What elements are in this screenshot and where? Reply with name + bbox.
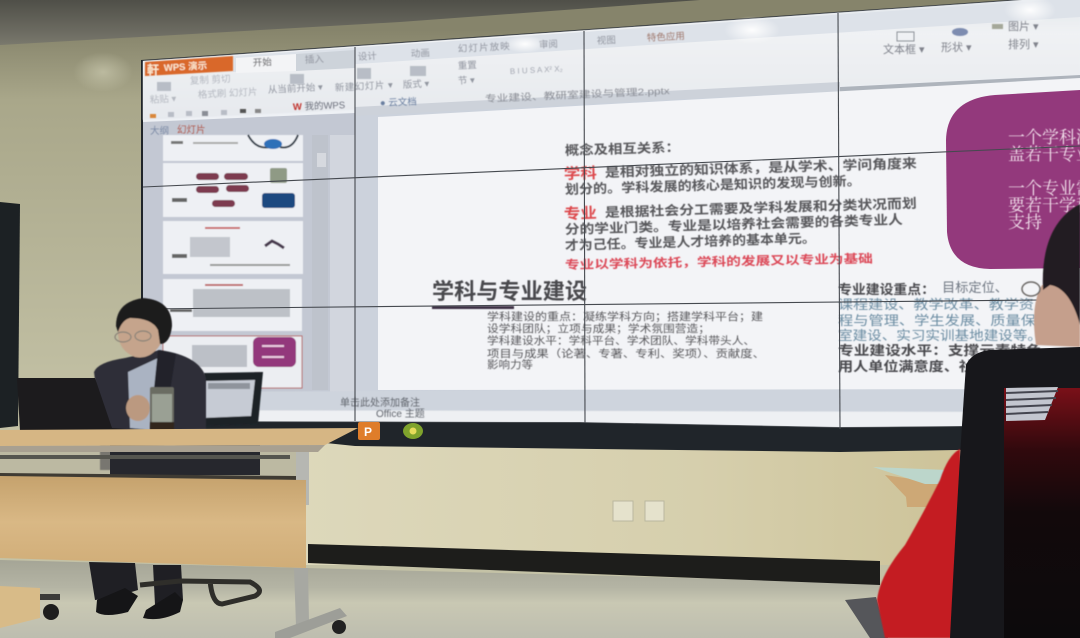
ribbon labels: 插入 bbox=[305, 53, 325, 66]
slide text: discipline building bbox=[487, 310, 765, 371]
ribbon labels: 形状 ▾ bbox=[941, 40, 972, 54]
thumbnail 3 bbox=[163, 221, 303, 274]
slide text: concepts: 概念及相互关系： bbox=[565, 140, 680, 158]
glasses bbox=[1022, 282, 1040, 296]
slide text: concepts: 分的学业门类。专业是以培养社会需要的各类专业人 bbox=[565, 212, 903, 237]
audience head bbox=[1022, 204, 1080, 347]
slide text: concepts: 专业以学科为依托，学科的发展又以专业为基础 bbox=[565, 251, 873, 272]
seat mesh with red jacket behind bbox=[1004, 388, 1080, 638]
ribbon labels: 新建幻灯片 ▾ bbox=[335, 79, 393, 94]
application window bbox=[143, 0, 1080, 427]
callout text: 支持 bbox=[1008, 213, 1042, 232]
notes labels: Office 主题 bbox=[376, 408, 425, 420]
ribbon labels: 设计 bbox=[358, 50, 378, 63]
slide text: discipline building: 学科建设的重点：凝练学科方向；搭建学科平台；建 bbox=[487, 310, 764, 323]
slide thumbnails bbox=[163, 135, 303, 388]
glasses bbox=[115, 331, 151, 342]
slide heading: 学科与专业建设 bbox=[432, 279, 587, 304]
WPS button bbox=[145, 56, 233, 77]
ribbon icons bbox=[150, 24, 1003, 118]
slide text: major building: 目标定位、 bbox=[942, 280, 1008, 295]
ribbon labels: 审阅 bbox=[539, 38, 558, 51]
striped shirt through mesh bbox=[1006, 387, 1058, 421]
foreground chair foot bbox=[845, 597, 888, 638]
front-left wooden block and caster bbox=[0, 586, 60, 628]
ribbon labels: 排列 ▾ bbox=[1008, 37, 1039, 51]
ribbon labels: 重置 bbox=[458, 59, 477, 72]
thumbnail 2 bbox=[163, 163, 303, 217]
thumbnail 5 bbox=[163, 336, 302, 388]
ribbon labels: ● 云文档 bbox=[380, 96, 417, 109]
ribbon labels: 视图 bbox=[597, 34, 616, 47]
ribbon labels: 粘贴 ▾ bbox=[150, 93, 177, 106]
ribbon labels: 幻灯片放映 bbox=[458, 40, 511, 55]
ribbon labels bbox=[150, 20, 1039, 137]
audience member in red bbox=[877, 449, 965, 638]
ribbon labels: B I U S A X² X₂ bbox=[510, 64, 563, 76]
ribbon labels: 大纲 bbox=[150, 125, 169, 137]
lecturer's chair back bbox=[198, 372, 263, 426]
notes labels: 单击此处添加备注 bbox=[340, 396, 420, 409]
slide text: concepts: 才为己任。专业是人才培养的基本单元。 bbox=[565, 231, 816, 253]
face bbox=[1034, 285, 1080, 347]
audience table bbox=[873, 467, 947, 507]
ribbon labels: 复制 剪切 bbox=[190, 73, 231, 87]
purple callout bbox=[946, 90, 1080, 269]
heading underline bbox=[432, 306, 514, 309]
lecturer bbox=[94, 298, 206, 470]
callout text bbox=[1008, 128, 1080, 232]
ribbon labels: W 我的WPS bbox=[293, 99, 345, 113]
slide text: concepts: 划分的。学科发展的核心是知识的发现与创新。 bbox=[565, 173, 861, 197]
slide text: discipline building: 学科建设水平：学科平台、学术团队、学科带头人、 bbox=[487, 334, 755, 347]
desk legs bbox=[296, 445, 309, 505]
slide bbox=[378, 78, 1080, 390]
laptop bbox=[17, 378, 140, 431]
ribbon labels: 格式刷 幻灯片 bbox=[198, 86, 258, 101]
lecture desk bbox=[0, 428, 358, 638]
thumbnail panel bbox=[143, 113, 355, 420]
hair bbox=[116, 298, 172, 344]
screen frame and taskbar band bbox=[141, 0, 1080, 452]
glare bbox=[724, 16, 780, 44]
slide text: concepts: 是相对独立的知识体系，是从学术、学问角度来 bbox=[605, 156, 917, 180]
shirt bbox=[128, 358, 158, 430]
taskbar icons: P bbox=[364, 425, 372, 439]
hair bbox=[1043, 204, 1080, 325]
under-desk shadow space bbox=[0, 445, 306, 478]
lecturer legs and chair base bbox=[89, 562, 259, 619]
ribbon labels: 节 ▾ bbox=[458, 75, 475, 87]
slide text: major building: 专业建设重点： bbox=[838, 282, 935, 297]
jacket bbox=[94, 350, 206, 470]
slide text: major building bbox=[838, 280, 1042, 374]
WPS button: 軒 bbox=[147, 62, 159, 77]
slide text: concepts: 是根据社会分工需要及学科发展和分类状况而划 bbox=[605, 196, 917, 220]
slide text: major building: 课程建设、教学改革、教学资 bbox=[838, 297, 1034, 312]
ribbon labels: 从当前开始 ▾ bbox=[268, 81, 323, 96]
taskbar icons bbox=[358, 422, 423, 440]
hand bbox=[126, 395, 150, 421]
left dark monitor edge bbox=[0, 202, 20, 428]
screen seams bbox=[143, 13, 1080, 429]
neck and face bbox=[118, 312, 164, 358]
slide text: discipline building: 项目与成果（论著、专著、专利、奖项）、贡献度、 bbox=[487, 347, 765, 360]
slide text: major building: 程与管理、学生发展、质量保 bbox=[838, 313, 1036, 328]
slide text: discipline building: 设学科团队；立项与成果；学术氛围营造； bbox=[487, 322, 710, 335]
paper on table bbox=[873, 467, 947, 484]
slide text: major building: 室建设、实习实训基地建设等。 bbox=[838, 328, 1042, 343]
video wall screen bbox=[141, 0, 1080, 452]
slide text: concepts bbox=[564, 140, 917, 272]
notes labels bbox=[340, 396, 425, 420]
ribbon labels: 开始 bbox=[253, 56, 273, 69]
slide text: major building: 专业建设水平：支撑元素特色 bbox=[838, 343, 1042, 358]
desktop bbox=[0, 428, 358, 446]
modesty panel bbox=[0, 476, 306, 568]
ribbon labels: 特色应用 bbox=[647, 30, 685, 44]
ribbon labels: 幻灯片 bbox=[177, 124, 206, 136]
notes strip bbox=[143, 388, 1080, 412]
ribbon labels: 专业建设、教研室建设与管理2.pptx bbox=[485, 85, 670, 105]
slide text: discipline building: 影响力等 bbox=[487, 358, 534, 371]
tab strip bbox=[233, 0, 1080, 72]
slide pane background bbox=[355, 76, 1080, 425]
desk foot bbox=[275, 608, 347, 638]
glass cup bbox=[150, 387, 174, 431]
ribbon labels: 图片 ▾ bbox=[1008, 20, 1039, 33]
foreground office chair bbox=[950, 347, 1080, 638]
ribbon labels: 动画 bbox=[411, 48, 430, 60]
ribbon labels: 版式 ▾ bbox=[403, 78, 430, 91]
slide text: major building: 用人单位满意度、社 bbox=[838, 359, 974, 374]
WPS button: WPS 演示 bbox=[164, 60, 208, 74]
thumbnail 1 bbox=[163, 135, 303, 161]
ribbon labels: 文本框 ▾ bbox=[883, 42, 925, 56]
slide text: concepts: 专业 bbox=[564, 204, 597, 223]
ribbon bbox=[143, 0, 1080, 120]
thumbnail 4 bbox=[163, 279, 302, 331]
slide text: concepts: 学科 bbox=[564, 164, 597, 183]
